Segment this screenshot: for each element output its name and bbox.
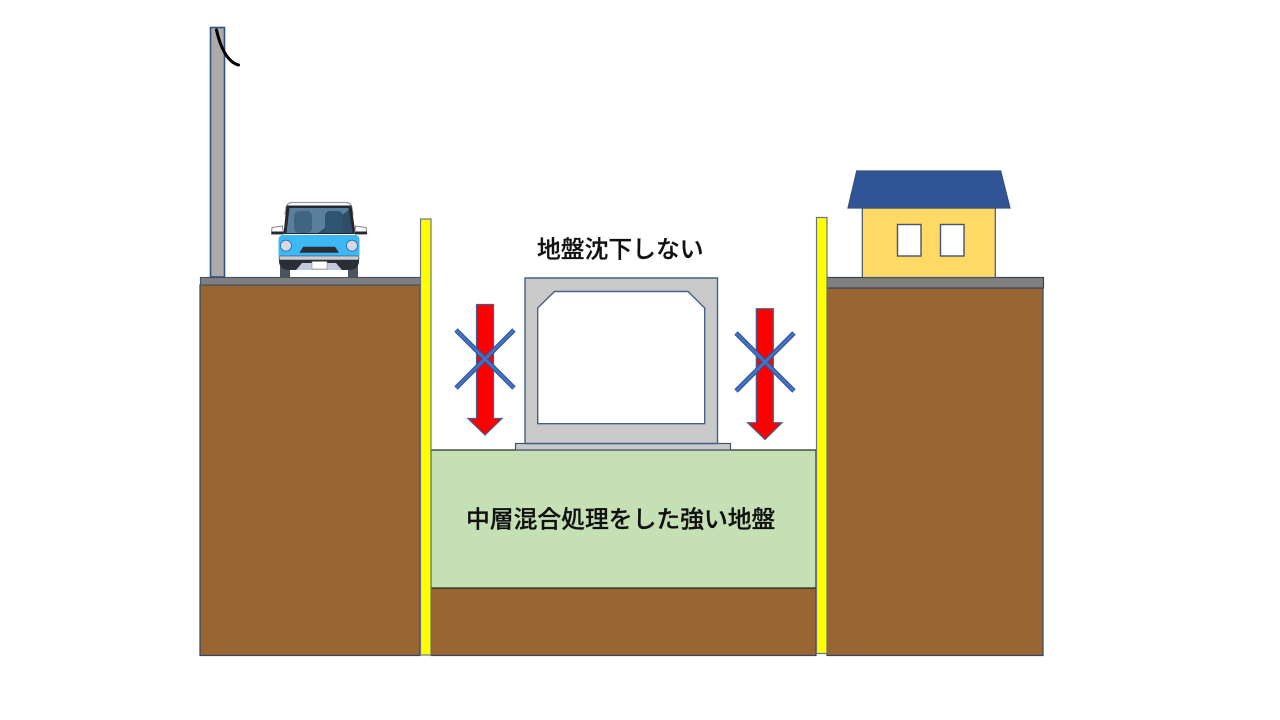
label: no ground subsidence: 地盤沈下しない [537,236,704,264]
left road surface [200,278,420,285]
label: strong ground: 中層混合処理をした強い地盤 [466,506,775,534]
right red arrow crossed out [736,309,794,440]
right road surface [827,278,1044,288]
icon: car [272,202,367,277]
left sheet pile [420,219,431,655]
icon: house [848,171,1010,278]
box culvert [516,278,730,450]
utility pole [210,28,238,277]
left red arrow crossed out [456,304,514,435]
stabilized ground layer [431,450,816,588]
right sheet pile [816,218,827,654]
left ground block [200,285,420,656]
right ground block [827,288,1043,656]
excavation floor soil [431,588,816,656]
